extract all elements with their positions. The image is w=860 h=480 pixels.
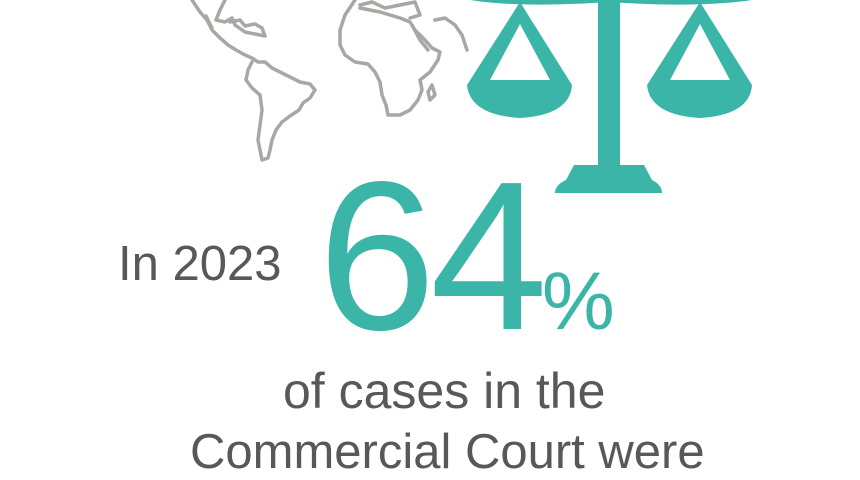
text: In 2023: In 2023 — [118, 237, 282, 291]
text: Commercial Court were: Commercial Court were — [190, 425, 705, 479]
stat: 64%: 64% — [318, 137, 615, 374]
icon: scales of justice — [467, 0, 752, 193]
icon: world map — [190, 0, 469, 162]
text: of cases in the: of cases in the — [283, 363, 605, 419]
